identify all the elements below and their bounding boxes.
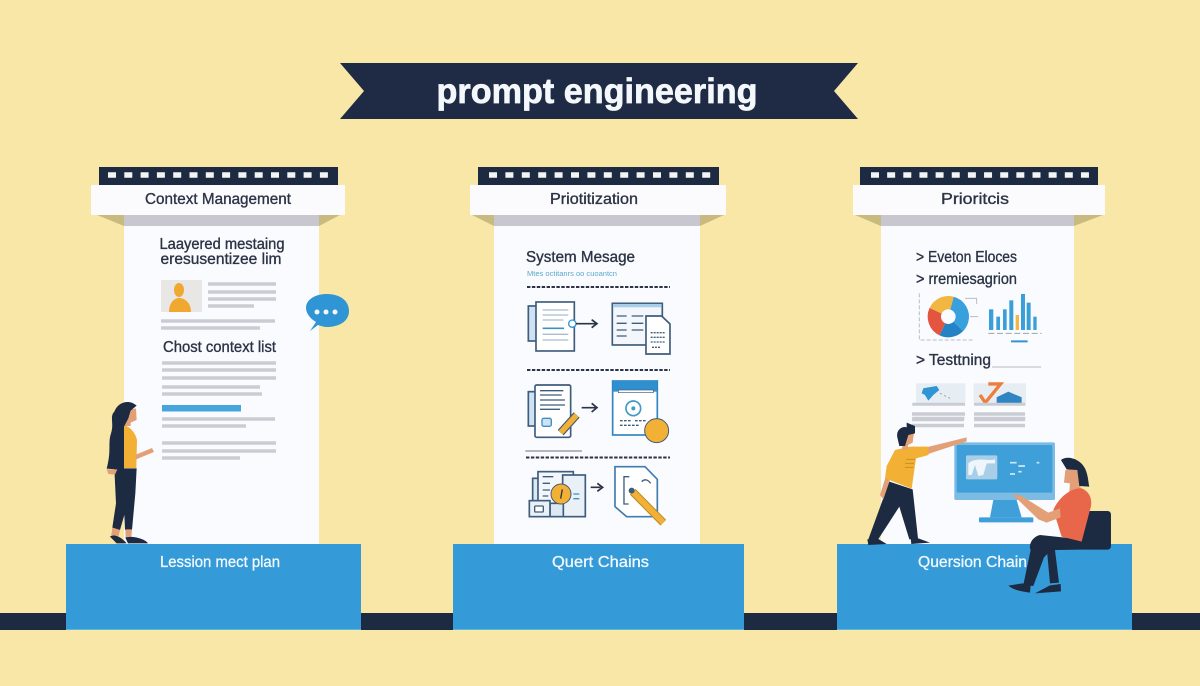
icon: profile photo	[161, 280, 202, 312]
icon row 3: folder to pencil	[529, 467, 663, 523]
chart: bars	[988, 294, 1042, 341]
column sheet	[881, 226, 1074, 544]
column capital	[91, 167, 345, 226]
text: testing: > Testtning	[916, 352, 991, 369]
base: question chain: Quersion Chain	[918, 554, 1027, 571]
icon: chat bubble	[306, 294, 349, 331]
column capital: Context Management	[145, 191, 292, 208]
column sheet	[494, 226, 700, 544]
icon: desktop monitor	[954, 442, 1055, 522]
panel: prioritization	[453, 167, 744, 630]
text: chost context list: Chost context list	[163, 339, 277, 356]
panel: priorities and testing	[837, 167, 1132, 630]
icon row 1: document to window	[528, 302, 670, 354]
text lines: intro	[161, 284, 276, 328]
text: bullet list: > Eveton Eloces	[916, 249, 1017, 266]
text: layered messaging heading: eresusentizee lim	[160, 251, 282, 268]
chart: donut	[919, 293, 978, 340]
figure: man pointing	[867, 423, 967, 545]
base: query chains	[453, 544, 744, 630]
base: lesson plan: Lession mect plan	[160, 554, 280, 571]
highlight bar	[162, 405, 241, 412]
panel: context management	[66, 167, 361, 630]
dividers	[526, 287, 670, 458]
text: layered messaging heading: Laayered mestaing	[160, 236, 284, 253]
base: query chains: Quert Chains	[552, 554, 649, 571]
thumbnails	[912, 383, 1026, 418]
text lines: list	[162, 363, 276, 458]
figure: seated person	[1008, 458, 1111, 593]
text: bullet list	[916, 249, 1017, 288]
icon row 2: edit to review	[525, 381, 669, 451]
text: subtitle: Mtes octitanrs oo cuoantcn	[527, 269, 617, 278]
text lines	[912, 414, 1025, 426]
text: layered messaging heading	[160, 236, 284, 268]
column capital: Priotitization	[550, 191, 638, 208]
column sheet	[124, 226, 319, 544]
column capital	[470, 167, 726, 226]
text: system message: System Mesage	[526, 249, 635, 266]
title banner: prompt engineering	[436, 72, 758, 111]
title banner	[340, 63, 858, 119]
column capital	[853, 167, 1105, 226]
text: testing	[916, 352, 1041, 369]
column capital: Prioritcis	[941, 191, 1009, 208]
base: lesson plan	[66, 544, 361, 630]
text: bullet list: > rremiesagrion	[916, 271, 1017, 288]
base: question chain	[837, 544, 1132, 630]
figure: standing woman	[107, 402, 154, 543]
